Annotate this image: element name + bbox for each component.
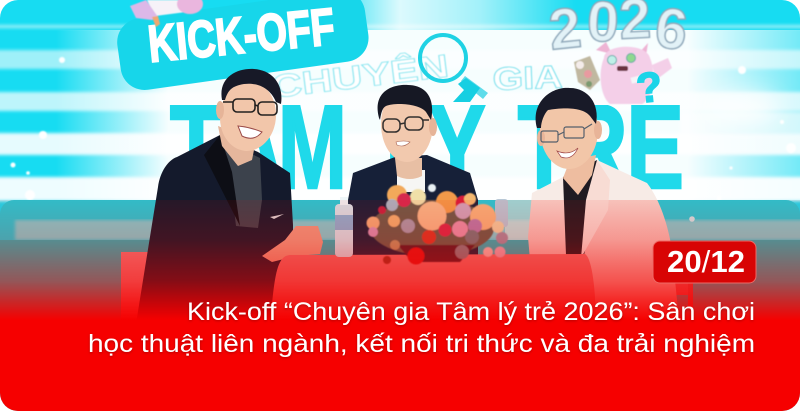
kick-off badge (114, 0, 372, 93)
balloons: 2026 (549, 0, 687, 51)
backdrop subheading: Chuyên gia: CHUYÊN (269, 48, 451, 105)
caption headline: học thuật liên ngành, kết nối tri thức và đa trải nghiệm (88, 330, 755, 358)
backdrop heading: Tâm Lý Trẻ: T (518, 80, 570, 214)
backdrop heading: Tâm Lý Trẻ: Ẻ (626, 80, 684, 214)
backdrop subheading: Chuyên gia (274, 52, 563, 98)
icon: question mark: ? (634, 63, 664, 112)
person: right speaker in light blazer (528, 88, 680, 330)
person: centre speaker in black blazer (348, 85, 478, 262)
person: left speaker in black blazer (135, 69, 293, 330)
chairs (121, 252, 693, 322)
sparkles (10, 57, 796, 200)
caption headline (88, 298, 755, 358)
backdrop heading: Tâm Lý Trẻ: L (385, 80, 438, 214)
icon: magnifier with arrow (420, 35, 488, 102)
lower stage panel: teal band (0, 200, 800, 309)
backdrop heading: Tâm Lý Trẻ: Â (222, 80, 284, 214)
red gradient overlay (0, 200, 800, 411)
table: red tablecloth (272, 254, 596, 317)
backdrop heading: Tâm Lý Trẻ: M (278, 80, 347, 214)
mascot: pink monster with bouquet (574, 42, 672, 104)
backdrop heading: Tâm Lý Trẻ: T (170, 80, 223, 214)
backdrop heading: Tâm Lý Trẻ: R (565, 80, 628, 214)
water bottle (335, 197, 508, 257)
backdrop heading: Tâm Lý Trẻ (170, 105, 682, 190)
date badge (653, 241, 756, 283)
backdrop subheading: Chuyên gia: GIA (492, 59, 563, 97)
caption headline: Kick-off “Chuyên gia Tâm lý trẻ 2026”: Sân chơi (187, 298, 755, 326)
date text: 20/12 (667, 244, 745, 279)
hands: left speaker (262, 226, 323, 262)
flower arrangement (366, 184, 508, 264)
icon: megaphone (130, 0, 203, 27)
backdrop heading: Tâm Lý Trẻ: Ý (428, 80, 486, 214)
